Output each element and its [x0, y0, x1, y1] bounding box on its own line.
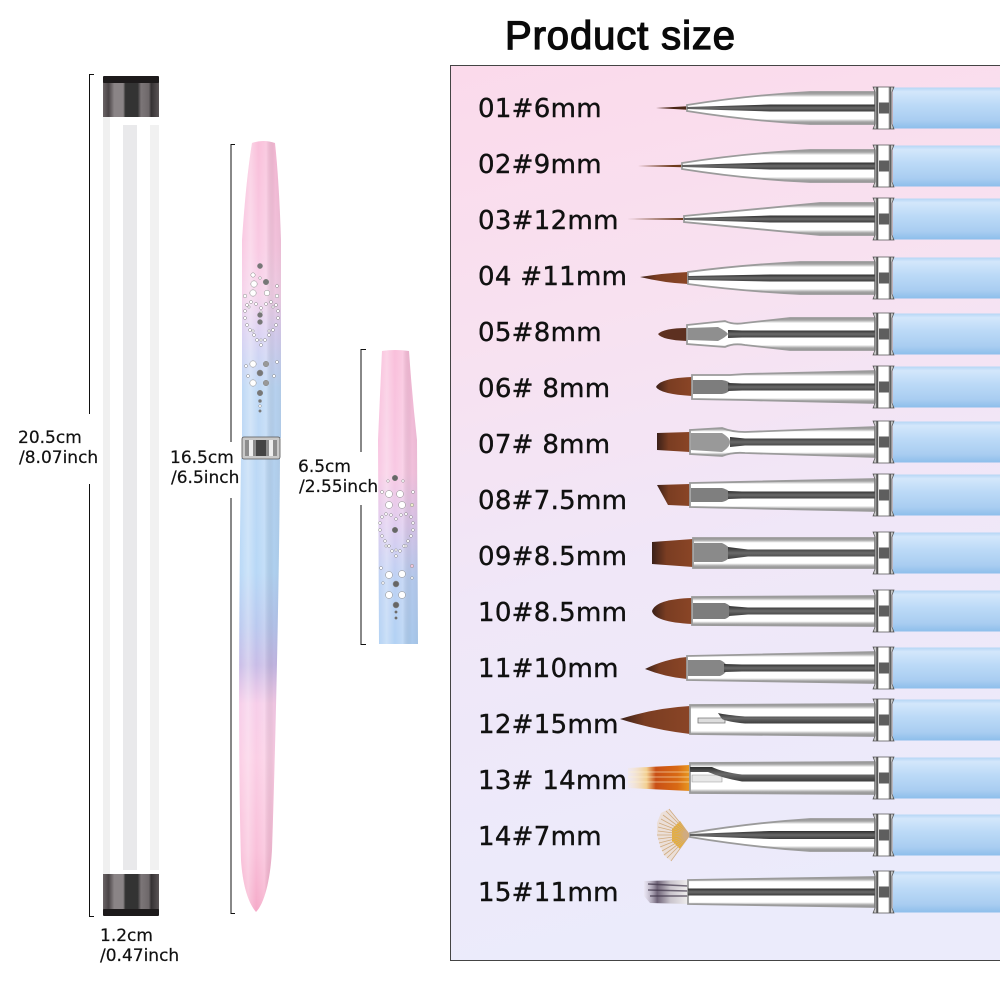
dimension: case diameter: 1.2cm	[100, 926, 153, 946]
dimension: brush length	[170, 144, 239, 914]
brush 01	[478, 87, 1000, 129]
dimension: case diameter	[100, 926, 179, 966]
brush 08: 08#7.5mm	[478, 486, 627, 516]
rhinestone pattern on cap	[379, 475, 414, 619]
brush 10: 10#8.5mm	[478, 598, 627, 628]
brush 04: 04 #11mm	[478, 262, 627, 292]
dimension: cap length: /2.55inch	[299, 477, 378, 497]
brush 15: 15#11mm	[478, 878, 619, 908]
dimension: case diameter: /0.47inch	[100, 946, 179, 966]
rhinestone pattern on brush	[243, 263, 280, 412]
brush 08	[478, 474, 1000, 516]
dimension: case length	[18, 74, 98, 916]
case bottom cap	[103, 874, 159, 916]
brush 14: 14#7mm	[478, 822, 602, 852]
brush 05	[478, 313, 1000, 355]
assembled brush	[239, 141, 281, 912]
brush 02: 02#9mm	[478, 150, 602, 180]
title: Product size	[505, 14, 735, 58]
brush 05: 05#8mm	[478, 318, 602, 348]
brush 01: 01#6mm	[478, 94, 602, 124]
brush 11: 11#10mm	[478, 654, 619, 684]
dimension: brush length: 16.5cm	[170, 448, 234, 468]
acrylic case	[103, 76, 159, 916]
brush 07	[478, 421, 1000, 463]
dimension: case length: /8.07inch	[19, 448, 98, 468]
brush 06: 06# 8mm	[478, 374, 610, 404]
brush 13: 13# 14mm	[478, 766, 627, 796]
brush 09: 09#8.5mm	[478, 542, 627, 572]
case top cap	[103, 76, 159, 117]
dimension: case length: 20.5cm	[18, 428, 82, 448]
brush 09	[478, 532, 1000, 574]
brush 03: 03#12mm	[478, 206, 619, 236]
brush 11	[478, 647, 1000, 689]
brush 03	[478, 198, 1000, 240]
panel: brush sizes	[450, 66, 1000, 960]
metal collar	[242, 437, 280, 459]
brush 04	[478, 257, 1000, 299]
brush 07: 07# 8mm	[478, 430, 610, 460]
brush 12: 12#15mm	[478, 710, 619, 740]
brush cap	[378, 350, 418, 644]
brush 15	[478, 871, 1000, 913]
brush 02	[478, 145, 1000, 187]
dimension: brush length: /6.5inch	[171, 468, 239, 488]
dimension: cap length: 6.5cm	[298, 457, 351, 477]
brush 06	[478, 366, 1000, 408]
brush 10	[478, 590, 1000, 632]
brush 13	[478, 757, 1000, 799]
brush 14	[478, 809, 1000, 861]
dimension: cap length	[298, 350, 378, 644]
brush 12	[478, 699, 1000, 741]
